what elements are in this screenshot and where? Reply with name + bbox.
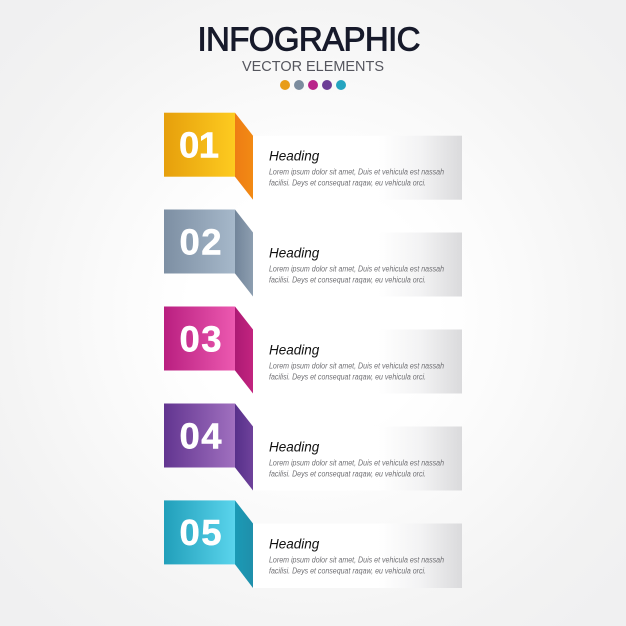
item 04 [164,404,462,490]
body text 03 [269,362,444,382]
item 01 [164,113,462,200]
item 02 [164,210,462,296]
text panel 02 [253,232,462,296]
body text 02: facilisi. Deys et consequat raqaw, eu vehicula orci. [269,276,426,284]
number 01: 01 [179,124,219,165]
heading 05: Heading [269,536,320,552]
number block 02 [164,210,235,274]
text panel 03 [253,330,462,394]
body text 05 [269,556,444,576]
body text 01 [269,168,444,188]
body text 01: facilisi. Deys et consequat raqaw, eu vehicula orci. [269,178,426,188]
body text 03: Lorem ipsum dolor sit amet, Duis et vehicula est nassah [269,362,444,370]
number block 01 [164,113,235,177]
body text 04 [269,458,444,478]
item 03 [164,306,462,394]
number 03: 03 [180,318,222,359]
number 04: 04 [180,415,222,456]
body text 04: facilisi. Deys et consequat raqaw, eu vehicula orci. [269,470,426,478]
body text 03: facilisi. Deys et consequat raqaw, eu vehicula orci. [269,372,426,382]
number block 04 [164,404,235,468]
body text 01: Lorem ipsum dolor sit amet, Duis et vehicula est nassah [269,168,444,176]
subtitle: VECTOR ELEMENTS [242,58,384,75]
text panel 04 [253,426,462,490]
number 02: 02 [180,221,222,262]
number block 03 [164,306,235,370]
item 05 [164,500,462,588]
fold 03 [235,306,253,394]
heading 02: Heading [269,246,320,260]
body text 04: Lorem ipsum dolor sit amet, Duis et vehicula est nassah [269,458,444,468]
body text 05: Lorem ipsum dolor sit amet, Duis et vehicula est nassah [269,556,444,564]
text panel 05 [253,524,462,588]
colour dots [280,80,346,90]
fold 05 [235,500,253,588]
heading 03: Heading [269,342,320,358]
title: INFOGRAPHIC [198,20,420,58]
heading 04: Heading [269,440,320,454]
heading 01: Heading [269,148,320,164]
fold 01 [235,113,253,200]
fold 04 [235,404,253,490]
number 05: 05 [180,512,222,553]
number block 05 [164,500,235,564]
body text 02 [269,264,444,284]
fold 02 [235,210,253,296]
body text 05: facilisi. Deys et consequat raqaw, eu vehicula orci. [269,566,426,576]
text panel 01 [253,136,462,200]
body text 02: Lorem ipsum dolor sit amet, Duis et vehicula est nassah [269,264,444,274]
